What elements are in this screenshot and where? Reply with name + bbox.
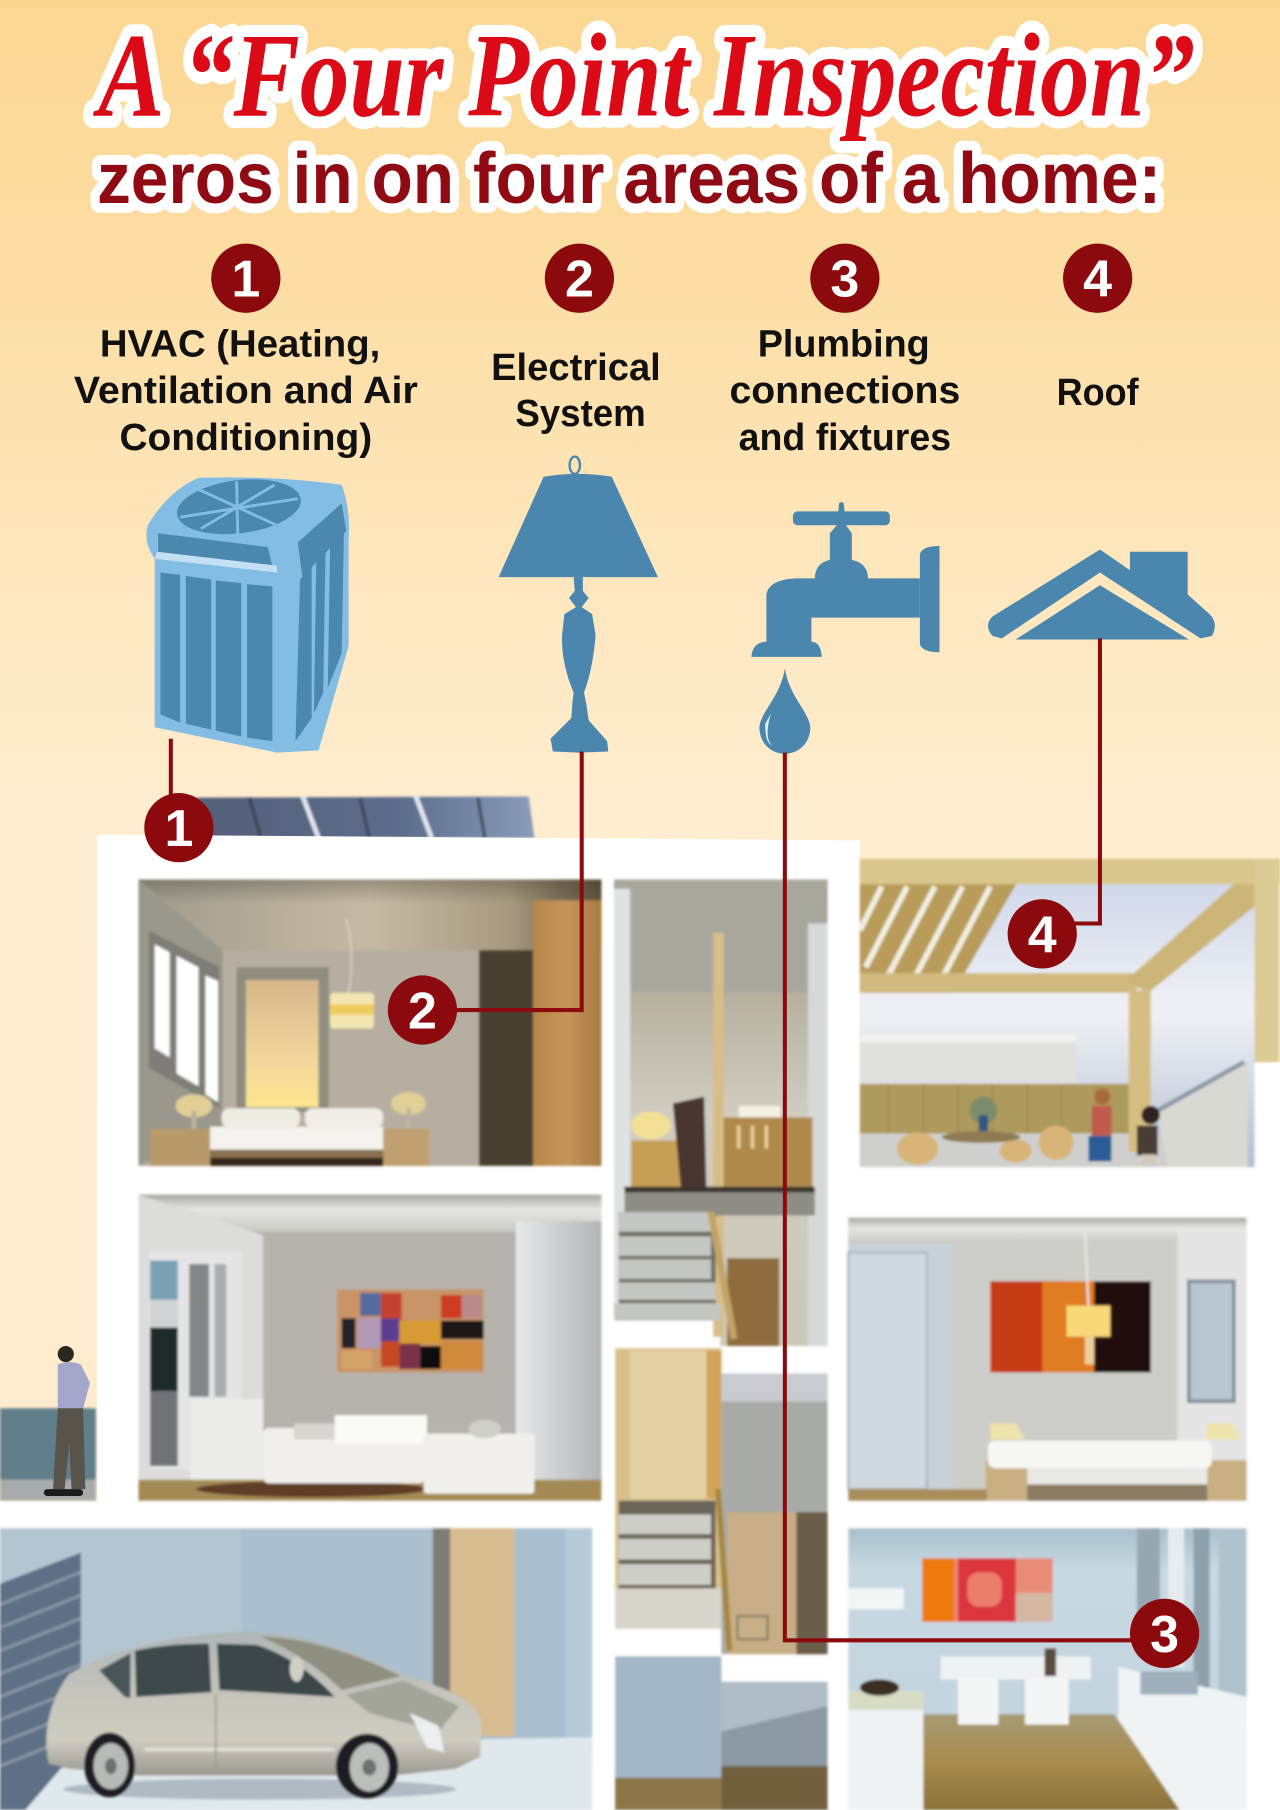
- marker 4: 4: [1028, 906, 1057, 964]
- room: terrace with pergola: [860, 859, 1280, 1167]
- kids: [1088, 1089, 1111, 1161]
- connector line 3: [785, 753, 1143, 1640]
- room: kitchen: [848, 1528, 1247, 1810]
- marker 3: [1130, 1599, 1199, 1668]
- car: [46, 1632, 481, 1800]
- item 2: electrical heading: [491, 244, 661, 435]
- item 1: HVAC heading: Conditioning): [119, 417, 372, 459]
- room: garage: [0, 1528, 592, 1810]
- item 3: plumbing heading: Plumbing: [758, 324, 930, 366]
- room: right bedroom: [848, 1218, 1247, 1501]
- room: living room: [139, 1195, 601, 1501]
- man standing: [44, 1346, 90, 1496]
- item 2: electrical heading: 2: [565, 251, 594, 309]
- icon: lamp: [499, 457, 658, 753]
- item 1: HVAC heading: 1: [231, 251, 260, 309]
- marker 2: 2: [408, 983, 437, 1041]
- item 4: roof heading: 4: [1083, 251, 1112, 309]
- room: upper stairwell: [614, 880, 828, 1346]
- marker 1: 1: [164, 800, 193, 858]
- marker 3: 3: [1150, 1606, 1179, 1664]
- icon: water tap: [751, 502, 940, 657]
- item 3: plumbing heading: [729, 244, 960, 459]
- icon: roof: [988, 549, 1215, 640]
- house cross-section: [0, 835, 1280, 1810]
- item 1: HVAC heading: Ventilation and Air: [74, 370, 418, 412]
- marker 4: [1008, 899, 1077, 968]
- item 4: roof heading: [1057, 244, 1139, 414]
- subtitle: zeros in on four areas of a home:: [97, 138, 1161, 219]
- item 3: plumbing heading: connections: [729, 370, 960, 412]
- item 1: HVAC heading: [74, 244, 418, 459]
- item 2: electrical heading: System: [515, 393, 646, 435]
- abstract painting: [337, 1289, 484, 1373]
- item 2: electrical heading: Electrical: [491, 347, 661, 389]
- connector line 1: [169, 739, 173, 808]
- item 1: HVAC heading: HVAC (Heating,: [100, 324, 380, 366]
- solar panels: [196, 795, 534, 838]
- icon: water drop: [759, 668, 810, 754]
- room: lower stairwell: [615, 1348, 828, 1654]
- icon: air conditioning unit: [146, 473, 349, 753]
- white structure: [0, 835, 1280, 1810]
- item 4: roof heading: Roof: [1057, 372, 1139, 414]
- item 3: plumbing heading: and fixtures: [739, 417, 951, 459]
- railing and balcony: [0, 1408, 96, 1501]
- room: basement passage: [615, 1656, 828, 1810]
- room: upper bedroom: [139, 880, 601, 1166]
- connector line 4: [1068, 638, 1100, 923]
- marker 1: [144, 793, 214, 862]
- marker 2: [388, 975, 457, 1045]
- item 3: plumbing heading: 3: [830, 251, 859, 309]
- connector line 2: [450, 751, 582, 1010]
